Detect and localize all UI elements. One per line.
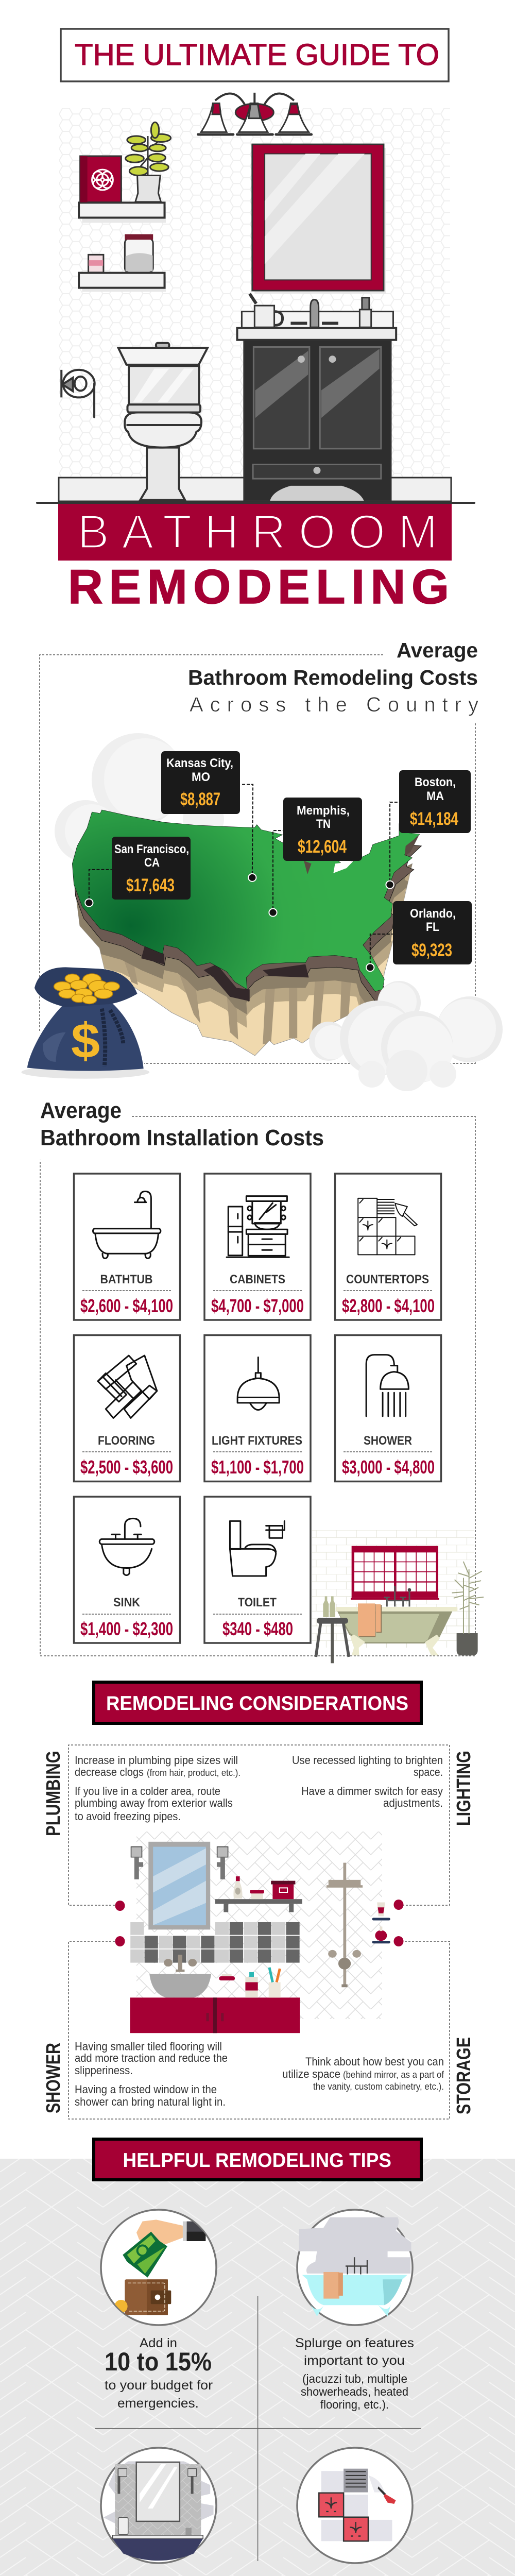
text: lighting: adjustments.	[383, 1797, 443, 1809]
cost tag: San Francisco: CA	[144, 856, 160, 870]
heading: average bathroom remodeling costs	[188, 638, 478, 716]
cost tag: Orlando: Orlando,	[410, 907, 456, 921]
cost tag: Kansas City: MO	[192, 770, 210, 784]
wall lamp	[198, 93, 312, 134]
cost tag: San Francisco: $17,643	[126, 875, 175, 895]
heading: average bathroom remodeling costs: Average	[397, 638, 478, 662]
heading: average bathroom installation costs	[40, 1098, 324, 1150]
card: sink	[74, 1497, 180, 1643]
card: bathtub	[74, 1174, 180, 1320]
tile wall	[59, 108, 450, 477]
connector: Boston	[386, 802, 399, 889]
dashed frame: costs	[40, 655, 475, 1063]
mirror	[148, 1842, 210, 1929]
text: lighting: space.	[414, 1766, 443, 1778]
banner: remodeling considerations	[94, 1682, 421, 1723]
card: shower: $3,000 - $4,800	[342, 1456, 435, 1478]
dashed frames: considerations	[68, 1745, 450, 2119]
icon: tub	[297, 2210, 413, 2325]
text: storage	[282, 2055, 444, 2092]
text: shower: Having a frosted window in the	[75, 2083, 217, 2096]
tip: budget: Add in	[140, 2336, 177, 2350]
baseboard	[59, 478, 451, 501]
label: plumbing: PLUMBING	[43, 1751, 64, 1836]
icon: tiles	[297, 2448, 413, 2563]
herringbone wall	[136, 1832, 382, 2019]
shelf: book and plant	[79, 122, 171, 223]
card: light fixtures: LIGHT FIXTURES	[212, 1434, 302, 1448]
text: lighting: Use recessed lighting to brighten	[292, 1754, 443, 1767]
tip: counterspace	[86, 2448, 231, 2576]
illustration: bathtub scene	[312, 1530, 483, 1663]
cost tag: Boston: $14,184	[410, 809, 458, 829]
card: countertops: COUNTERTOPS	[346, 1273, 429, 1286]
text: plumbing: decrease clogs	[75, 1766, 144, 1778]
heading: average bathroom installation costs: Average	[40, 1098, 122, 1123]
card: light fixtures	[204, 1335, 311, 1482]
icon: countertops	[358, 1198, 417, 1255]
window	[351, 1546, 439, 1600]
text: storage: (behind mirror, as a part of	[343, 2070, 444, 2080]
connector: San Francisco	[85, 870, 112, 907]
text: shower: Having smaller tiled flooring will	[75, 2040, 222, 2053]
text: plumbing: If you live in a colder area, route	[75, 1785, 220, 1798]
card: toilet: $340 - $480	[222, 1618, 293, 1639]
card: shower	[335, 1335, 441, 1482]
icon: money bag: $	[71, 1013, 100, 1069]
icon: shower	[366, 1355, 408, 1416]
shelf with bottles	[215, 1876, 302, 1912]
heading: average bathroom remodeling costs: Bathroom Remodeling Costs	[188, 666, 478, 689]
cost tag: Boston: MA	[426, 789, 444, 803]
toilet	[118, 343, 208, 500]
card: countertops: $2,800 - $4,100	[342, 1295, 435, 1316]
card: sink: $1,400 - $2,300	[80, 1618, 173, 1639]
icon: flooring	[98, 1355, 157, 1418]
tip: budget: to your budget for	[105, 2378, 213, 2393]
cost tag: Orlando	[393, 901, 472, 964]
vanity	[237, 294, 396, 501]
card: toilet	[204, 1497, 311, 1643]
icon: vanity	[101, 2448, 216, 2563]
connector: Memphis	[269, 831, 283, 917]
tip: splurge	[295, 2210, 414, 2411]
text: shower: shower can bring natural light in.	[75, 2095, 226, 2108]
title box: THE ULTIMATE GUIDE TO	[75, 38, 439, 72]
cost tag: Kansas City	[161, 751, 240, 814]
connector: Kansas City	[242, 785, 256, 882]
icon: light fixture	[237, 1358, 279, 1410]
label: shower: SHOWER	[43, 2043, 64, 2113]
clouds behind map	[55, 733, 224, 862]
wall sconces	[131, 1847, 228, 1879]
map of the United States	[72, 810, 421, 1056]
cost tag: Boston: Boston,	[415, 775, 456, 789]
tip: budget	[101, 2210, 216, 2411]
toilet paper holder	[61, 370, 95, 417]
tip: budget: 10 to 15%	[105, 2347, 212, 2376]
shelf with bottles	[372, 1902, 390, 1943]
card: cabinets	[204, 1174, 311, 1320]
tip: options	[283, 2448, 425, 2576]
icon: toilet	[230, 1521, 284, 1576]
text: shower: add more traction and reduce the	[75, 2052, 228, 2064]
card: flooring: $2,500 - $3,600	[80, 1456, 173, 1478]
title box	[61, 29, 449, 81]
text: shower	[75, 2040, 228, 2108]
label: lighting: LIGHTING	[453, 1751, 475, 1826]
card: bathtub: BATHTUB	[100, 1273, 152, 1286]
banner: remodeling considerations: REMODELING CONSIDERATIONS	[106, 1692, 408, 1715]
card: sink: SINK	[113, 1596, 141, 1609]
text: storage: the vanity, custom cabinetry, etc.).	[313, 2081, 444, 2092]
card: cabinets: CABINETS	[230, 1273, 285, 1286]
connector: Orlando	[366, 934, 393, 971]
shower fixture	[327, 1863, 363, 1987]
icon: cash and wallet	[101, 2210, 216, 2325]
potted plant	[452, 1562, 483, 1655]
mirror	[252, 144, 386, 294]
illustration: bathroom wall	[130, 1832, 390, 2033]
text: lighting	[292, 1754, 443, 1809]
banner: helpful remodeling tips: HELPFUL REMODELING TIPS	[123, 2149, 391, 2172]
text: storage: utilize space	[282, 2067, 340, 2080]
text: shower: slipperiness.	[75, 2064, 133, 2077]
heading: average bathroom installation costs: Bathroom Installation Costs	[40, 1125, 324, 1150]
card: shower: SHOWER	[364, 1434, 412, 1448]
card: cabinets: $4,700 - $7,000	[211, 1295, 304, 1316]
cost tag: Memphis: TN	[316, 817, 331, 831]
card: flooring: FLOORING	[98, 1434, 155, 1448]
cost tag: Memphis: $12,604	[298, 837, 347, 857]
banner: helpful remodeling tips	[94, 2139, 421, 2180]
dashed frame: installation costs	[40, 1116, 475, 1656]
stool and bottles	[316, 1596, 349, 1663]
clouds foreground	[309, 981, 503, 1091]
cost tag: Kansas City: Kansas City,	[166, 756, 233, 770]
tip: splurge: showerheads, heated	[301, 2385, 408, 2398]
shelf: jars	[79, 234, 166, 292]
icon: money bag	[21, 967, 149, 1079]
tip: splurge: (jacuzzi tub, multiple	[302, 2372, 407, 2385]
text: plumbing: (from hair, product, etc.).	[147, 1768, 241, 1778]
icon: cabinets	[227, 1196, 289, 1257]
vanity and sink	[130, 1955, 300, 2033]
text: plumbing: plumbing away from exterior walls	[75, 1797, 233, 1809]
bathtub	[336, 1586, 457, 1655]
tip grid lines	[95, 2296, 421, 2561]
card: bathtub: $2,600 - $4,100	[80, 1295, 173, 1316]
cost tag: San Francisco: San Francisco,	[114, 842, 189, 856]
card: light fixtures: $1,100 - $1,700	[211, 1456, 304, 1478]
icon: sink	[99, 1518, 154, 1575]
panel: tips background	[0, 2159, 515, 2576]
label: storage: STORAGE	[453, 2037, 475, 2114]
text: plumbing: Increase in plumbing pipe sizes will	[75, 1754, 238, 1767]
text: storage: Think about how best you can	[305, 2055, 444, 2068]
text: lighting: Have a dimmer switch for easy	[301, 1785, 443, 1798]
icon: bathtub	[93, 1192, 161, 1258]
card: countertops	[335, 1174, 441, 1320]
tile band	[130, 1922, 300, 1963]
tip: budget: emergencies.	[117, 2396, 199, 2411]
floor line	[36, 502, 475, 504]
cost tag: Kansas City: $8,887	[180, 789, 220, 809]
text: plumbing: to avoid freezing pipes.	[75, 1810, 181, 1823]
brick wall	[312, 1530, 474, 1648]
card: flooring	[74, 1335, 180, 1482]
heading: average bathroom remodeling costs: Across the Country	[190, 693, 478, 716]
text: plumbing	[75, 1754, 241, 1823]
heading: remodeling: REMODELING	[68, 560, 449, 614]
card: toilet: TOILET	[238, 1596, 277, 1609]
tip: splurge: Splurge on features	[295, 2336, 414, 2350]
cost tag: Orlando: FL	[426, 920, 439, 934]
cost tag: Memphis	[283, 798, 362, 861]
tip: splurge: important to you	[304, 2353, 405, 2368]
cost tag: San Francisco	[112, 837, 191, 900]
bathroom banner: BATHROOM	[77, 505, 438, 558]
cost tag: Boston	[399, 770, 471, 833]
tip: splurge: flooring, etc.).	[320, 2398, 389, 2411]
bathroom illustration	[59, 93, 451, 501]
cost tag: Orlando: $9,323	[411, 940, 452, 960]
cost tag: Memphis: Memphis,	[297, 804, 350, 818]
